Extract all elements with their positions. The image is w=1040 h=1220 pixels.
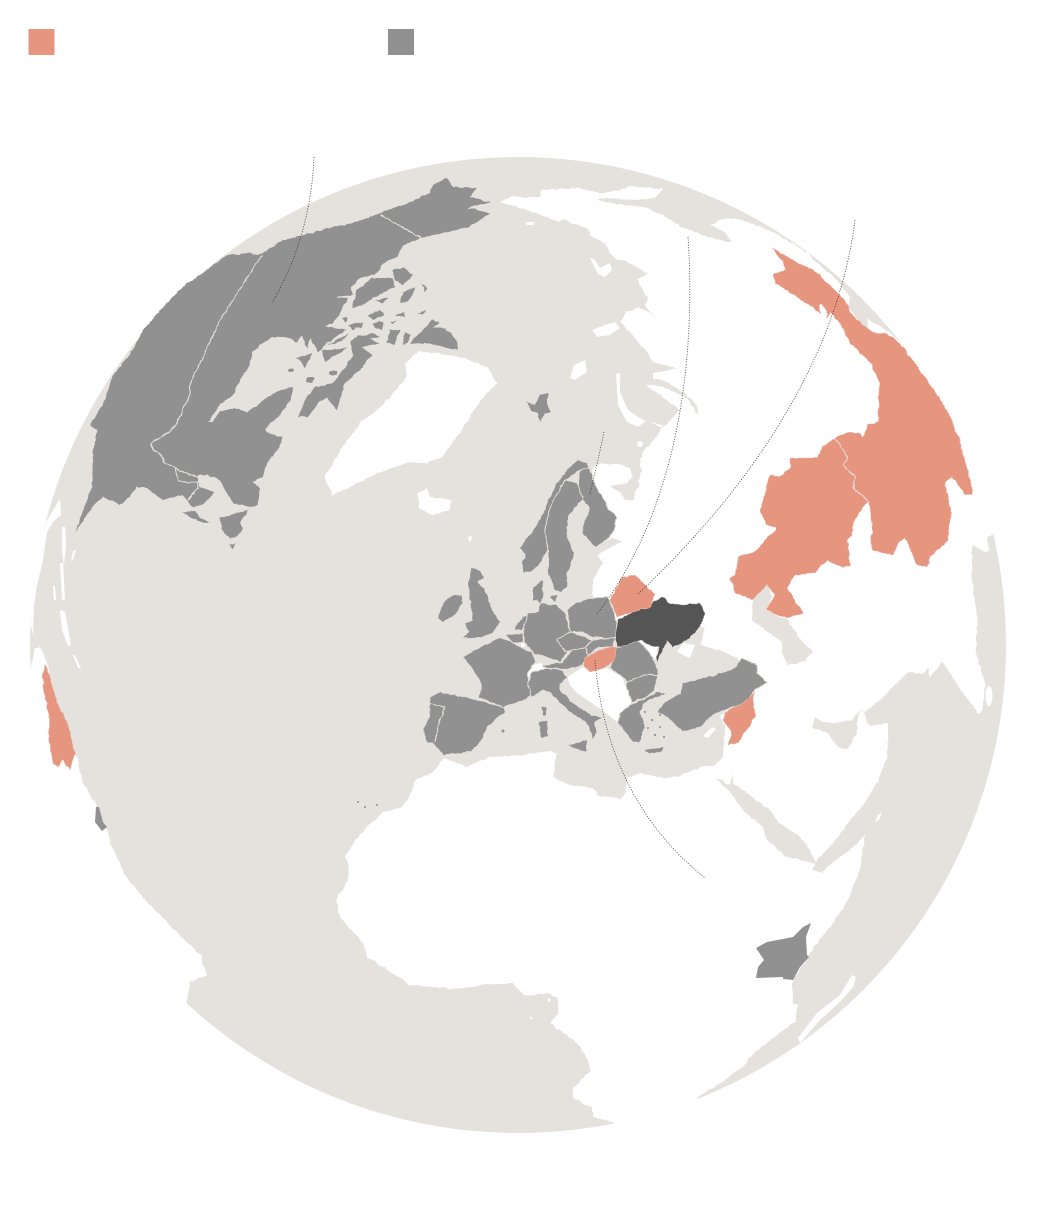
Canada and United States mainland <box>75 178 490 533</box>
Slovakia <box>585 638 615 655</box>
beige peninsula: Gulf <box>812 706 864 750</box>
white countries: Switzerland, Balkans, Moldova, Crimea <box>468 536 695 722</box>
Arctic archipelago <box>288 268 458 418</box>
Corsica <box>542 707 546 715</box>
salmon countries <box>43 248 972 770</box>
Russia and China region <box>730 248 972 618</box>
Sweden <box>545 480 585 593</box>
Aegean islands <box>502 711 665 738</box>
Crete <box>645 747 663 753</box>
white landmass: Eurasia and Africa <box>336 186 1030 1140</box>
Italy <box>528 668 603 740</box>
Czechia <box>557 632 593 652</box>
Germany <box>523 603 570 662</box>
Ireland <box>438 595 463 622</box>
Sardinia <box>539 720 548 737</box>
leader line: Hungary <box>595 660 705 878</box>
internal border <box>835 438 870 503</box>
Iceland <box>417 488 452 515</box>
Norway <box>520 460 590 573</box>
Syria <box>723 692 755 745</box>
beige inland sea: Caspian <box>752 585 813 665</box>
France <box>463 637 535 707</box>
southern grey country <box>756 923 811 980</box>
white coastal cut-out: Pacific side <box>15 647 207 1010</box>
Austria <box>543 648 588 670</box>
Benelux <box>513 615 528 630</box>
United Kingdom <box>462 568 500 638</box>
globe disc <box>30 157 1006 1133</box>
leader line: top left <box>272 157 314 303</box>
North America in grey <box>75 178 490 549</box>
Poland <box>567 597 617 640</box>
legend swatch: salmon category <box>28 29 54 55</box>
Iberia <box>423 692 505 755</box>
lake notch <box>817 303 829 319</box>
leader line: Finland <box>590 432 604 494</box>
white detail: small islands and slits <box>31 222 992 1043</box>
Portugal border <box>431 704 445 742</box>
Baja peninsula <box>43 665 75 770</box>
Europe grey countries <box>423 460 767 755</box>
leader line: Belarus <box>638 220 855 594</box>
leader line: Poland <box>597 237 690 614</box>
Bulgaria <box>627 675 658 702</box>
Finland <box>578 468 617 547</box>
Svalbard <box>527 393 551 422</box>
Hungary <box>584 647 617 672</box>
tiny grey islands <box>357 801 378 808</box>
Romania <box>610 640 658 682</box>
border lines <box>151 215 421 500</box>
Sicily <box>568 740 587 752</box>
Hawaii patch <box>95 807 107 831</box>
Belarus <box>610 575 655 617</box>
Atlantic islands <box>182 510 248 549</box>
Greenland <box>325 352 497 495</box>
Turkey <box>657 658 767 732</box>
Denmark <box>533 580 543 603</box>
legend swatch: grey category <box>388 29 414 55</box>
Greece <box>618 692 668 743</box>
Ukraine <box>615 597 705 662</box>
